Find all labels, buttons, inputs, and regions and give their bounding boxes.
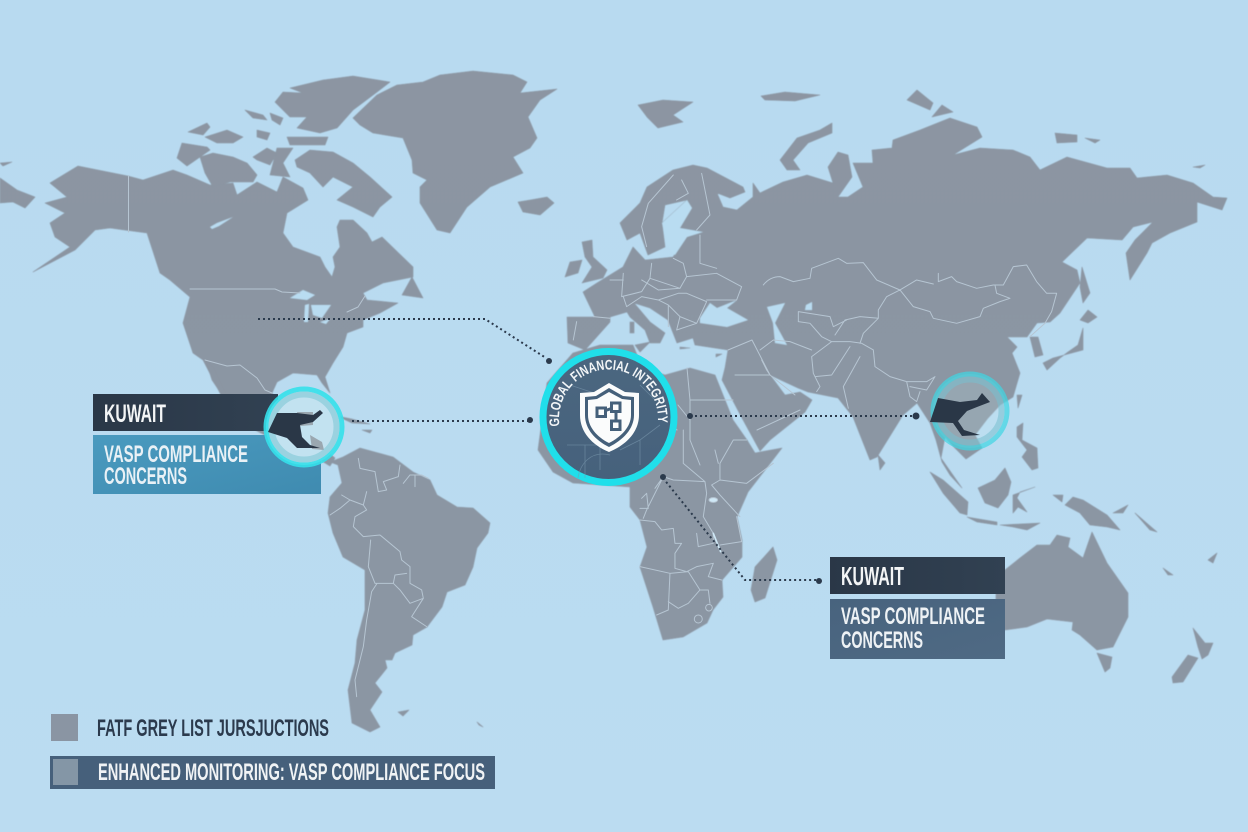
network nodes xyxy=(597,403,620,430)
baja california xyxy=(206,361,228,395)
inland seas xyxy=(662,200,812,345)
legend xyxy=(50,714,495,789)
callout body text: VASP COMPLIANCE xyxy=(104,441,248,468)
legend label: grey list: FATF GREY LIST JURSJUCTIONS xyxy=(97,715,329,742)
arctic islands xyxy=(177,76,392,217)
highlight ring: asia xyxy=(930,374,1007,448)
callout heading bar xyxy=(93,394,278,431)
legend swatch: grey list xyxy=(51,714,78,741)
country borders xyxy=(128,173,1057,697)
greenland xyxy=(353,71,557,233)
callout body text: VASP COMPLIANCE xyxy=(841,603,985,630)
callout heading: KUWAIT xyxy=(104,400,166,428)
south america xyxy=(328,448,490,732)
callout: kuwait right xyxy=(830,557,1005,659)
north america xyxy=(33,166,413,466)
callout heading: KUWAIT xyxy=(841,561,904,591)
connector: asia marker to badge xyxy=(687,412,920,420)
african continent xyxy=(538,345,782,640)
world map xyxy=(0,71,1227,732)
callout body text: CONCERNS xyxy=(104,463,187,490)
callout body text xyxy=(104,441,248,490)
connector: badge to lower callout xyxy=(660,474,822,584)
callout body text xyxy=(841,603,985,654)
central america land inside ring xyxy=(297,412,324,450)
callout: kuwait left xyxy=(93,394,321,494)
badge: global financial integrity xyxy=(540,348,678,486)
kuwait silhouette right xyxy=(930,393,990,436)
callout body panel xyxy=(93,435,321,494)
connector: kuwait callout to badge xyxy=(352,417,533,423)
callout heading bar xyxy=(830,557,1005,594)
badge curved title: GLOBAL FINANCIAL INTEGRITY xyxy=(549,360,668,426)
faint map lines in badge xyxy=(567,385,660,478)
eurasia xyxy=(567,118,1227,488)
lakes xyxy=(210,217,331,324)
legend bar: enhanced monitoring xyxy=(50,756,495,789)
connector: north america to badge xyxy=(258,319,552,364)
islands xyxy=(0,90,1217,727)
kuwait silhouette left xyxy=(268,410,323,448)
legend bar: enhanced monitoring: ENHANCED MONITORING: VASP COMPLIANCE FOCUS xyxy=(98,759,485,786)
highlight ring: americas xyxy=(266,389,342,465)
australia xyxy=(996,532,1128,650)
callout body text: CONCERNS xyxy=(841,627,923,654)
callout body panel xyxy=(830,599,1005,659)
shield icon xyxy=(580,383,639,452)
